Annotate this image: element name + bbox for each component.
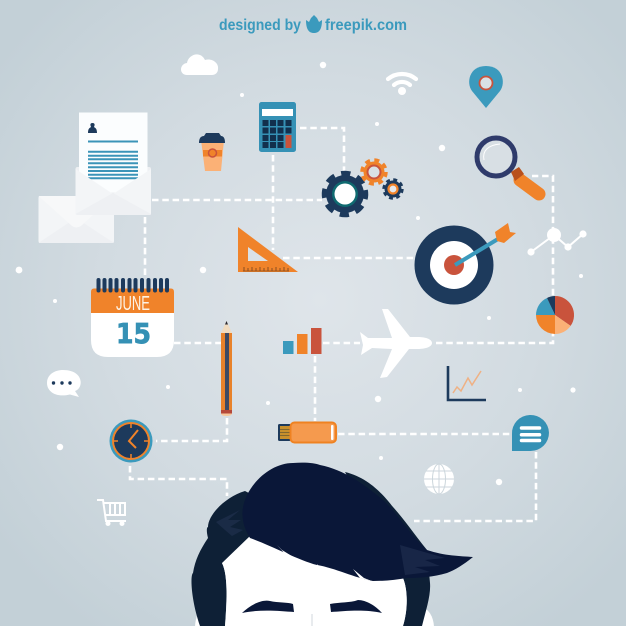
icon: documents and envelopes [38, 112, 151, 243]
orange gear [362, 160, 386, 184]
back envelope [38, 196, 114, 243]
line chart icon [448, 366, 486, 400]
icon: chat bubble [512, 415, 549, 451]
ears [195, 607, 434, 626]
icon: magnifying glass [477, 138, 539, 194]
icon: gears [321, 160, 402, 218]
pie chart [536, 296, 574, 334]
icon: target with arrow [414, 223, 516, 304]
calendar date: 15 [116, 317, 151, 350]
icon: cloud [181, 54, 218, 75]
hair back left [191, 491, 262, 626]
resume sheet [79, 112, 148, 192]
icon: calendar June 15 [91, 280, 174, 357]
hair back right [345, 472, 430, 626]
icon: usb drive [278, 422, 336, 442]
icon: network line graph [527, 228, 587, 256]
icon: freepik logo [306, 15, 322, 33]
front envelope back flap [76, 167, 151, 215]
icon: coffee cup [199, 133, 225, 171]
face [222, 536, 407, 626]
icon: shopping cart [97, 500, 126, 526]
bar chart [283, 328, 322, 354]
icon: wifi [388, 74, 416, 93]
icon: calculator [259, 102, 296, 152]
scattered background dots [16, 62, 583, 485]
small gear [384, 180, 402, 198]
nose hint [311, 614, 313, 626]
calendar rings [98, 280, 167, 290]
heading: freepik credit [219, 15, 407, 34]
hair highlights [216, 510, 445, 575]
dashed connector lines [130, 128, 553, 521]
icon: wall clock [110, 420, 152, 462]
credit text right: freepik.com [325, 17, 407, 34]
icon: pencil [221, 321, 232, 416]
icon: speech bubble with dots [47, 370, 81, 397]
eyebrows [242, 600, 382, 613]
credit text left: designed by [219, 17, 301, 34]
icon: location pin [469, 66, 503, 108]
large gear [321, 170, 369, 218]
hair notches [277, 545, 373, 582]
front envelope pocket [76, 169, 151, 215]
icon: set square ruler [238, 227, 298, 272]
calendar month: JUNE [116, 293, 150, 315]
icon: person [88, 123, 97, 133]
illustration: man's head [191, 463, 473, 626]
icon: airplane [360, 309, 432, 378]
icon: globe [424, 464, 454, 494]
hair front [242, 463, 473, 581]
